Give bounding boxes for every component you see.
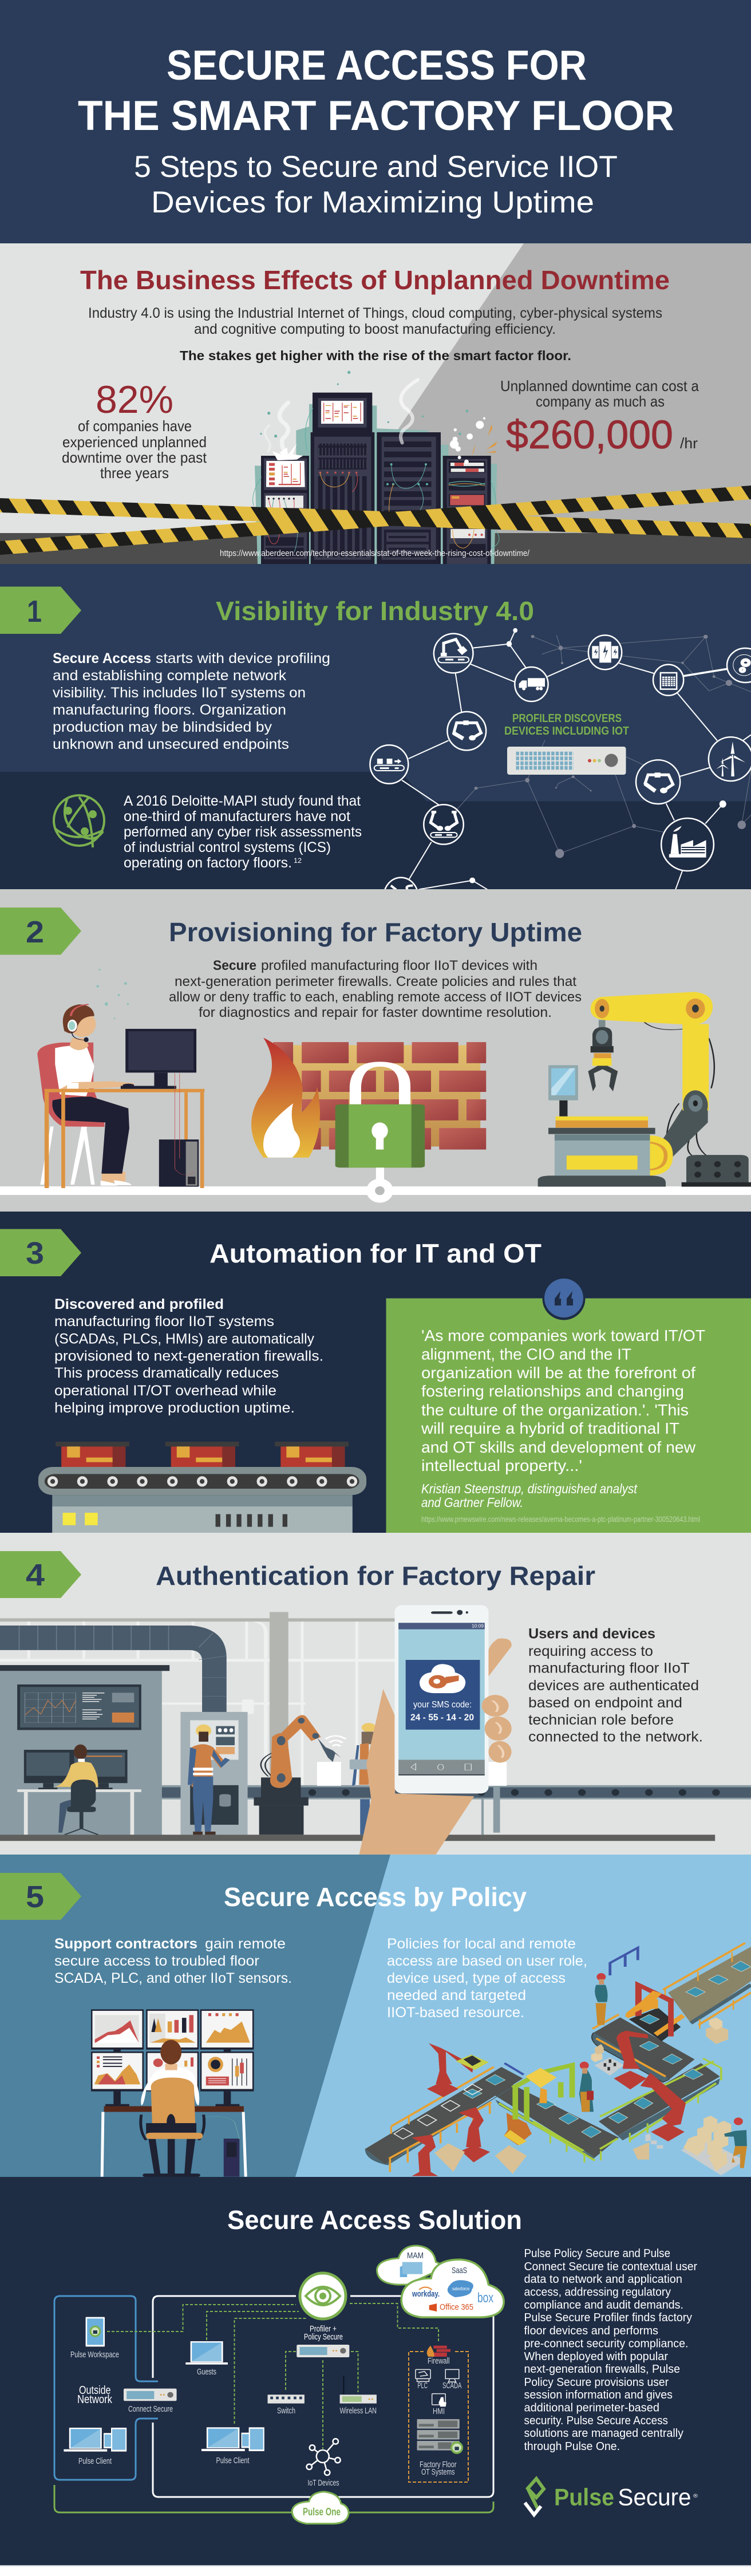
cloud labels: MAM [407,2251,424,2261]
icon: profiler eye [300,2273,346,2319]
body text [528,1626,703,1745]
subtitle: Devices for Maximizing Uptime [151,186,594,219]
body text: production may be blindsided by [53,719,272,735]
icon: profiler appliance [507,747,626,775]
cloud labels: Office 365 [440,2302,473,2312]
stat: 82 percent: 82% [96,378,173,421]
icon: devices group [64,2317,463,2475]
boundary: pulse one management [54,2485,493,2512]
logo: Pulse Secure: Secure [618,2484,691,2510]
badge: step 2 [0,908,81,955]
body text: visibility. This includes IIoT systems on [53,685,306,701]
study text: operating on factory floors. [124,855,292,871]
body text: devices are authenticated [528,1678,699,1694]
diagram labels: Wireless LAN [340,2406,377,2416]
body text: Secure [213,958,256,973]
illustration: factory floor [0,1612,751,1841]
heading: The Business Effects of Unplanned Downtime [80,265,670,295]
quote text: will require a hybrid of traditional IT [421,1419,679,1437]
body text: Policy Secure provisions user [524,2376,669,2389]
logo: Pulse Secure [525,2479,698,2515]
illustration: technician at desk [37,969,204,1188]
right text: access are based on user role, [387,1953,587,1969]
icon: calendar [661,673,677,689]
left text: SCADA, PLC, and other IIoT sensors. [54,1970,292,1986]
body text [169,958,582,1020]
connection lines [107,2303,438,2449]
title: THE SMART FACTORY FLOOR [78,93,674,139]
study text: performed any cyber risk assessments [124,824,362,840]
body text: connected to the network. [528,1729,703,1745]
icon: wind turbines [716,741,745,776]
body text: and establishing complete network [53,668,287,684]
diagram labels: Switch [277,2406,295,2416]
title: SECURE ACCESS FOR [167,42,587,89]
intro text: and cognitive computing to boost manufacturing efficiency. [194,321,556,337]
body text: allow or deny traffic to each, enabling remote access of IIOT devices [169,989,582,1005]
diagram labels: Policy Secure [304,2332,343,2342]
diagram labels [70,2324,461,2518]
left text: secure access to troubled floor [54,1953,259,1969]
badge: step 2: 2 [26,915,44,949]
body text: data to network and application [524,2273,682,2286]
subtitle: 5 Steps to Secure and Service IIOT [134,150,618,184]
stat: 82 percent: downtime over the past [62,449,207,466]
body text: next-generation firewalls, Pulse [524,2363,680,2376]
right text: device used, type of access [387,1970,566,1986]
panel: secure access solution [0,2177,751,2566]
diagram labels: Network [77,2393,113,2406]
quote attribution: Kristian Steenstrup, distinguished analyst [421,1481,638,1496]
study text [124,793,362,871]
panel: step 2 provisioning [0,889,751,1212]
body text: Secure Access [53,650,151,666]
body text: security. Pulse Secure Access [524,2415,668,2427]
body text [53,650,330,752]
illustration: conveyor with boxes [38,1442,366,1533]
boundary: outside network [54,2296,158,2480]
body text: unknown and unsecured endpoints [53,736,289,752]
diagram labels: PLC [418,2381,428,2390]
cloud labels: workday. [412,2289,440,2299]
panel: step 3 automation [0,1212,751,1533]
right text [387,1936,587,2021]
floor strip [0,1186,751,1195]
body text: provisioned to next-generation firewalls. [54,1348,323,1364]
diagram labels: Pulse Client [78,2456,112,2466]
panel: business effects of unplanned downtime [0,243,751,565]
title [78,42,674,139]
badge: step 3 [0,1229,81,1276]
body text: (SCADAs, PLCs, HMIs) are automatically [54,1331,314,1347]
stat: cost per hour [500,377,699,457]
logo: Pulse Secure: ® [693,2493,698,2499]
body text: helping improve production uptime. [54,1400,295,1416]
body text: requiring access to [528,1643,653,1659]
icon: tools [391,886,413,890]
body text: Pulse Policy Secure and Pulse [524,2247,670,2260]
icon: batteries [592,642,618,662]
diagram labels: Connect Secure [128,2404,173,2414]
badge: step 4 [0,1551,81,1598]
stat: 82 percent: experienced unplanned [62,433,207,451]
body text: for diagnostics and repair for faster downtime resolution. [199,1005,552,1020]
logo: Pulse Secure: Pulse [554,2484,614,2510]
icon: pulse one cloud [292,2492,349,2524]
icon: gears [733,654,751,676]
illustration: contractor at monitors [91,2009,254,2177]
diagram labels: Guests [197,2367,216,2377]
body text: Discovered and profiled [54,1296,224,1312]
panel: header [0,0,751,243]
icon: twin arms on conveyor [430,811,457,837]
diagram labels: OT Systems [421,2467,454,2477]
intro text: The stakes get higher with the rise of the smart factor floor. [180,348,571,363]
diagram labels: SCADA [442,2381,461,2390]
body text: access, addressing regulatory [524,2286,671,2298]
body text: This process dramatically reduces [54,1365,279,1381]
callout: profiler discovers [504,712,629,737]
boundary: secure network [153,2296,493,2497]
panel: step 1 visibility [0,564,751,916]
intro text: Industry 4.0 is using the Industrial Internet of Things, cloud computing, cyber-physical systems [88,305,662,321]
badge: step 5: 5 [26,1880,44,1914]
body text: profiled manufacturing floor IIoT devices with [261,958,537,973]
diagram labels: HMI [433,2407,445,2416]
body text: compliance and audit demands. [524,2299,683,2311]
icon: factory [669,826,706,858]
badge: step 4: 4 [26,1558,45,1592]
phone screen text [410,1624,484,1722]
badge: step 1 [0,586,81,634]
heading: Secure Access by Policy [224,1882,527,1912]
study text: 12 [294,857,302,865]
quote attribution: and Gartner Fellow. [421,1495,523,1510]
heading: Provisioning for Factory Uptime [169,917,582,947]
panel: quote [386,1277,751,1533]
quote text: 'As more companies work toward IT/OT [421,1327,705,1344]
stat: 82 percent: of companies have [78,417,192,435]
right text: needed and targeted [387,1987,526,2003]
source link: https://www.aberdeen.com/techpro-essentials/stat-of-the-week-the-rising-cost-of-downtime/ [220,549,530,558]
quote text: organization will be at the forefront of [421,1364,695,1382]
phone screen text: your SMS code: [413,1700,472,1710]
quote text: and OT skills and development of new [421,1438,696,1456]
stat: 82 percent: three years [100,464,169,482]
icon: robot arm [453,720,481,740]
quote text: alignment, the CIO and the IT [421,1346,631,1363]
icon: globe [54,795,104,847]
left text: gain remote [205,1936,286,1952]
heading: Automation for IT and OT [210,1238,541,1268]
group: factory floor dashed box [409,2352,468,2482]
diagram labels: Factory Floor [420,2460,457,2470]
callout: profiler discovers: DEVICES INCLUDING IOT [504,725,629,737]
body text: solutions are managed centrally [524,2427,683,2440]
body text: pre-connect security compliance. [524,2337,688,2350]
phone screen text: 24 - 55 - 14 - 20 [410,1713,474,1722]
body text: manufacturing floors. Organization [53,702,286,718]
phone screen text: 10:09 [472,1624,484,1629]
body text: Users and devices [528,1626,655,1642]
cloud labels: box [477,2290,493,2306]
body text: starts with device profiling [156,650,330,666]
cloud labels: salesforce [452,2286,469,2291]
cloud labels [407,2251,493,2312]
body text: When deployed with popular [524,2350,668,2363]
body text: additional perimeter-based [524,2401,659,2414]
illustration: smartphone with SMS code [359,1605,512,1855]
body text: Pulse Secure Profiler finds factory [524,2311,692,2324]
subtitle [134,150,618,219]
quote text: fostering relationships and changing [421,1382,684,1400]
body text: session information and gives [524,2389,673,2401]
study text: of industrial control systems (ICS) [124,839,331,855]
icon: boxes on conveyor [374,759,404,771]
body text [54,1296,323,1416]
body text: next-generation perimeter firewalls. Create policies and rules that [175,974,576,989]
stat: cost per hour: $260,000 [506,412,673,457]
diagram labels: Pulse Client [216,2456,250,2465]
quote text: the culture of the organization.'. 'This [421,1401,689,1419]
body text: technician role before [528,1712,674,1728]
illustration: firewall and padlock [251,1037,486,1203]
diagram labels: IoT Devices [308,2478,339,2488]
cloud labels: SaaS [452,2266,467,2275]
icon: robot arm second [645,772,673,794]
body text: operational IT/OT overhead while [54,1383,276,1399]
callout: profiler discovers: PROFILER DISCOVERS [512,712,622,725]
left text [54,1936,292,1986]
diagram: device network [370,628,751,916]
heading: Authentication for Factory Repair [156,1561,595,1591]
study text: one-third of manufacturers have not [124,808,350,825]
panel: step 5 secure access by policy [0,1855,751,2177]
illustration: isometric production line [365,1943,751,2176]
intro text [88,305,662,363]
diagram: network topology [54,2246,504,2524]
diagram labels: Profiler + [310,2324,337,2334]
quote text [421,1327,705,1474]
body text: through Pulse One. [524,2440,620,2453]
right text: IIOT-based resource. [387,2005,524,2021]
body text: floor devices and performs [524,2325,658,2337]
diagram labels: Pulse Workspace [70,2350,119,2360]
study text: A 2016 Deloitte-MAPI study found that [124,793,361,809]
left text: Support contractors [54,1936,197,1952]
quote attribution [421,1481,638,1510]
icon: truck [519,678,545,691]
diagram labels: Pulse One [303,2506,341,2518]
body text: manufacturing floor IIoT [528,1660,690,1676]
badge: step 5 [0,1873,81,1920]
body text: Connect Secure tie contextual user [524,2261,697,2273]
badge: step 3: 3 [26,1236,44,1271]
heading: Secure Access Solution [227,2205,522,2235]
body text [524,2247,697,2453]
body text: manufacturing floor IIoT systems [54,1313,274,1330]
illustration: caution tape [0,486,751,555]
body text: based on endpoint and [528,1695,682,1711]
right text: Policies for local and remote [387,1936,576,1952]
stat: cost per hour: /hr [680,435,698,452]
stat: cost per hour: company as much as [536,393,665,410]
stat: 82 percent [62,378,207,482]
icon: quote bubble [543,1277,585,1320]
panel: step 4 authentication [0,1533,751,1855]
illustration: yellow robot arm [538,992,751,1187]
badge: step 1: 1 [27,594,42,629]
icon: robot on conveyor [438,640,469,662]
heading: Visibility for Industry 4.0 [216,596,534,626]
stat: cost per hour: Unplanned downtime can cost a [500,377,699,395]
diagram labels: Firewall [428,2356,450,2366]
diagram labels: Outside [79,2384,111,2397]
quote text: intellectual property...' [421,1457,582,1474]
icon: MAM and SaaS clouds [377,2246,504,2317]
illustration: overheating server racks [253,371,499,565]
